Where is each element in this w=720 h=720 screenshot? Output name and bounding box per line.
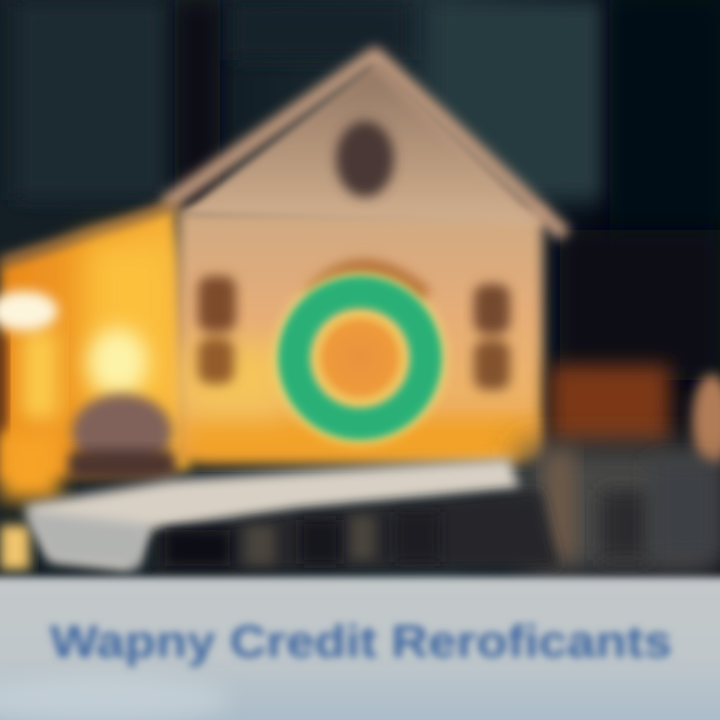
title: Wapny Credit Reroficants [50, 616, 672, 667]
roof gable [0, 55, 565, 262]
right window [474, 284, 510, 390]
icon: green ring [292, 290, 428, 426]
snowy ground [0, 577, 720, 720]
door arch behind ring [305, 260, 430, 305]
left wing: glowing orange wall [0, 205, 190, 570]
light: white window glow [0, 291, 58, 331]
left window [198, 276, 236, 384]
attic window [336, 121, 394, 197]
right-side fence and shed [520, 365, 720, 575]
light: porch lamp [88, 328, 148, 396]
car on driveway [68, 394, 176, 480]
house body [178, 210, 543, 460]
snow ledge and dark foundation [25, 458, 560, 572]
